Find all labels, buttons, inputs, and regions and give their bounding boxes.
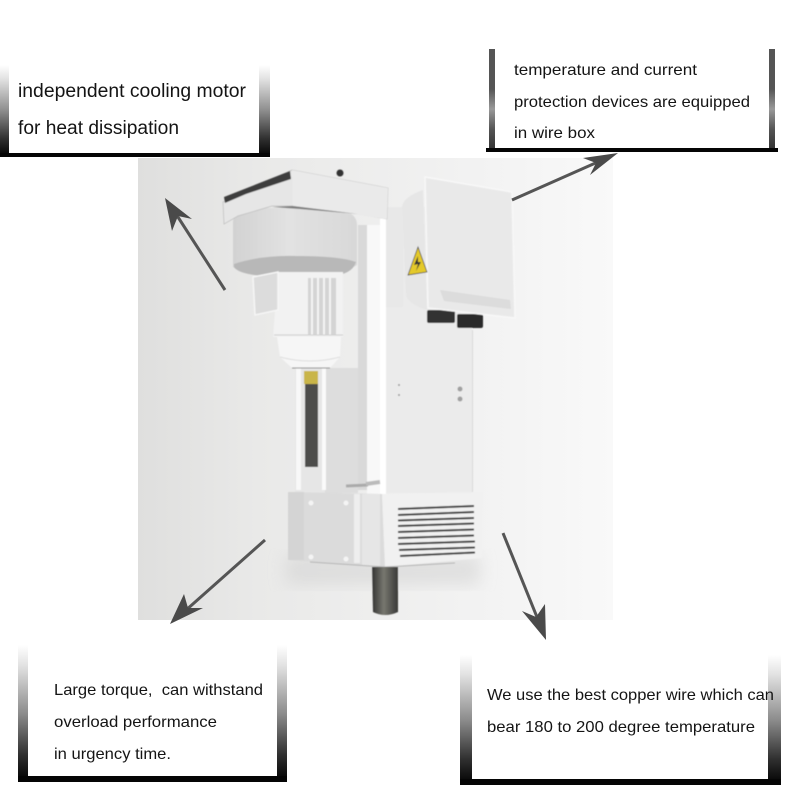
panel: large torque: overload performance <box>54 714 217 731</box>
column slot and warning label <box>304 371 318 467</box>
cooling fan housing <box>223 170 388 277</box>
panel: independent cooling motor <box>0 65 270 157</box>
panel: temperature and current protection <box>486 49 778 152</box>
arrow: to shaft housing <box>170 540 265 624</box>
panel: copper wire: We use the best copper wire which can <box>487 687 774 704</box>
panel: large torque: Large torque, can withstand <box>54 682 263 699</box>
arrow: to wire box <box>512 153 618 200</box>
cooling motor <box>253 272 343 368</box>
arrow: to copper winding <box>503 533 546 640</box>
motor photo illustration <box>223 170 515 615</box>
wire box <box>402 177 515 328</box>
panel: temperature and current protection: in wire box <box>514 125 595 142</box>
panel: independent cooling motor: for heat dissipation <box>18 118 179 139</box>
panel: temperature and current protection: protection devices are equipped <box>514 94 750 111</box>
vent louvres <box>398 506 475 556</box>
photo backdrop <box>138 158 613 620</box>
icon: high voltage warning <box>408 247 427 275</box>
bottom housing <box>288 492 483 567</box>
panel: large torque <box>18 645 287 782</box>
panel: independent cooling motor: independent cooling motor <box>18 81 247 102</box>
panel: large torque: in urgency time. <box>54 746 171 763</box>
arrow: to cooling motor <box>165 198 225 290</box>
output shaft <box>372 567 398 615</box>
panel: copper wire: bear 180 to 200 degree temperature <box>487 719 755 736</box>
panel: temperature and current protection: temperature and current <box>514 62 698 79</box>
white rear panel <box>295 207 473 495</box>
panel: copper wire <box>460 655 781 785</box>
wall shadow <box>285 555 480 585</box>
